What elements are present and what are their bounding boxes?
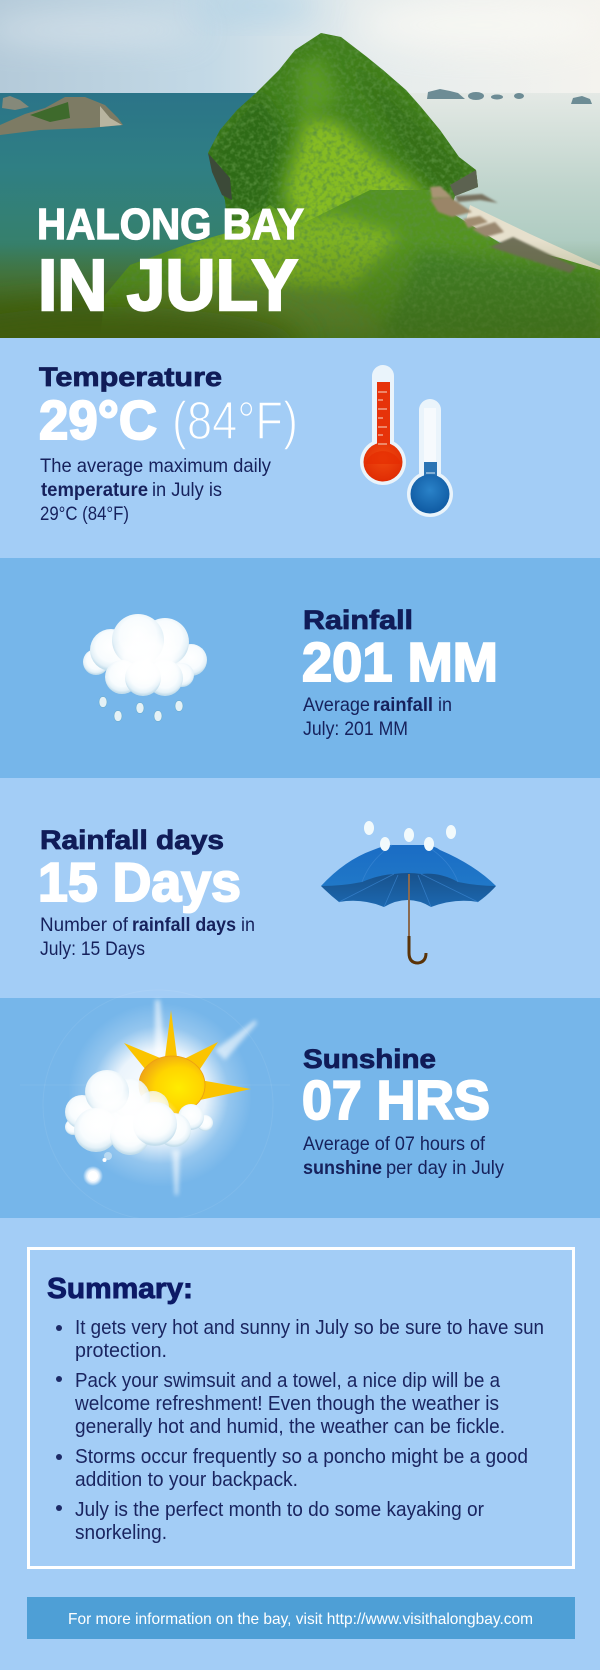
footer banner: For more information on the bay, visit http://www.visithalongbay.com (68, 1611, 533, 1628)
panel: hero photo of Halong Bay (0, 0, 600, 338)
stat: 29°C (84°F): 29°C (39, 389, 157, 451)
heading: rainfall days: Rainfall days (40, 825, 224, 855)
sun rays (124, 1010, 251, 1100)
text: rainfall days description (40, 915, 255, 960)
title: HALONG BAY (37, 200, 304, 249)
left islands (0, 96, 123, 135)
text: rainfall description: July: 201 MM (303, 719, 408, 740)
panel: rainfall days (0, 778, 600, 998)
icon: rain cloud (83, 614, 207, 722)
text: sunshine description: per day in July (386, 1158, 504, 1179)
cloud (65, 1070, 213, 1155)
text: sunshine description: Average of 07 hours of (303, 1134, 486, 1155)
foreground hillside (100, 185, 600, 338)
icon: umbrella (321, 821, 496, 963)
text: rainfall description: in (438, 695, 452, 716)
icon: thermometers (360, 365, 453, 517)
heading: rainfall: Rainfall (303, 605, 413, 635)
heading: temperature: Temperature (39, 362, 222, 392)
text: temperature description: temperature (41, 480, 148, 501)
text: rainfall days description: July: 15 Days (40, 939, 145, 960)
text: sunshine description: sunshine (303, 1158, 382, 1179)
text: rainfall description: rainfall (373, 695, 433, 716)
sea right (410, 93, 600, 266)
icon: red thermometer (360, 365, 406, 485)
mountain (208, 33, 478, 231)
title: IN JULY (38, 246, 298, 326)
stat: 29°C (84°F): (84°F) (172, 391, 298, 451)
stat: 29°C (84°F) (39, 389, 298, 451)
bullet list (56, 1317, 544, 1544)
sun disc (139, 1056, 205, 1114)
panel: lower background (0, 1218, 600, 1670)
title (39, 208, 304, 312)
bullet list: Pack your swimsuit and a towel, a nice dip will be a (75, 1370, 501, 1392)
text: temperature description: 29°C (84°F) (40, 504, 129, 525)
panel: sunshine (0, 990, 600, 1220)
bullet list: It gets very hot and sunny in July so be sure to have sun (75, 1317, 544, 1339)
panel: rainfall (0, 558, 600, 778)
bullet list: addition to your backpack. (75, 1469, 298, 1491)
icon: rain drops (99, 696, 183, 722)
heading: summary: Summary: (47, 1273, 193, 1305)
text: rainfall days description: Number of (40, 915, 129, 936)
text: rainfall description (303, 695, 452, 740)
panel: temperature (0, 338, 600, 558)
small cloud bubbles (83, 1152, 112, 1186)
stat: 201 MM: 201 MM (302, 631, 498, 693)
text: rainfall days description: rainfall days (132, 915, 236, 936)
bullet list: July is the perfect month to do some kayaking or (75, 1499, 484, 1521)
icon: drops on umbrella (364, 821, 456, 851)
footer banner (27, 1597, 575, 1639)
bullet list: generally hot and humid, the weather can be fickle. (75, 1416, 505, 1438)
bullet list: snorkeling. (75, 1522, 167, 1544)
text: temperature description: in July is (152, 480, 222, 501)
text: temperature description (40, 456, 271, 525)
text: rainfall description: Average (303, 695, 370, 716)
stat: 07 HRS: 07 HRS (302, 1069, 490, 1131)
sky (0, 0, 600, 95)
bullet list: Storms occur frequently so a poncho might be a good (75, 1446, 528, 1468)
text: sunshine description (303, 1134, 504, 1179)
bullet list: protection. (75, 1340, 167, 1362)
panel: summary box (28, 1248, 574, 1568)
beach (465, 205, 600, 276)
rock base of mountain (208, 153, 478, 200)
heading: sunshine: Sunshine (303, 1044, 436, 1074)
text: rainfall days description: in (241, 915, 255, 936)
icon: blue thermometer (407, 399, 453, 517)
bottom gradient (0, 248, 600, 338)
text: temperature description: The average maximum daily (40, 456, 271, 477)
stat: 15 Days: 15 Days (38, 851, 241, 913)
bullet list: welcome refreshment! Even though the weather is (74, 1393, 499, 1415)
sea left (0, 93, 256, 336)
distant islands (427, 89, 592, 104)
icon: sun behind cloud (20, 990, 290, 1220)
huts and wall (430, 186, 576, 273)
